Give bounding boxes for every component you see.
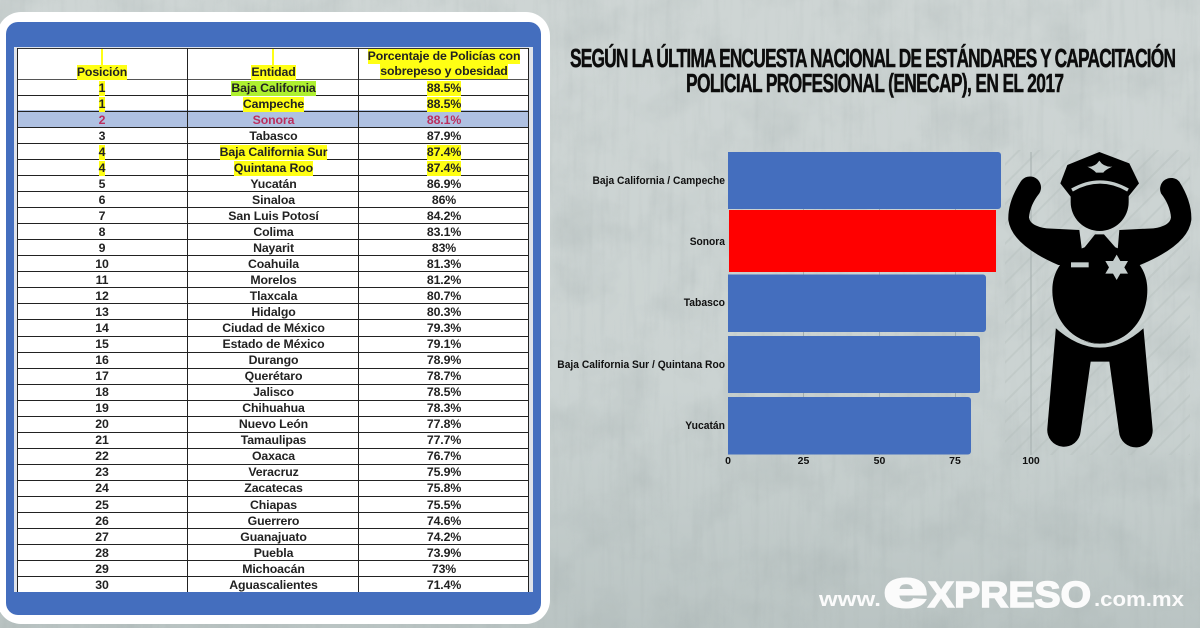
value axis labels: 50 <box>874 455 885 467</box>
highlighted row: Sonora <box>13 110 533 128</box>
table: ranking by state: Jalisco <box>253 385 294 399</box>
table: ranking by state: Ciudad de México <box>222 321 325 335</box>
table backing <box>14 47 532 592</box>
table: ranking by state <box>17 48 529 592</box>
table: ranking by state: 28 <box>95 546 109 560</box>
bar: Tabasco <box>728 274 986 332</box>
table: ranking by state: 12 <box>95 289 109 303</box>
table: ranking by state: Quintana Roo <box>234 161 313 175</box>
table: ranking by state: Zacatecas <box>244 481 303 495</box>
table: ranking by state: Sinaloa <box>252 193 295 207</box>
table: ranking by state: 83% <box>432 241 456 255</box>
table: ranking by state: Estado de México <box>223 337 324 351</box>
table: ranking by state: 81.3% <box>427 257 461 271</box>
table: ranking by state: Durango <box>249 353 298 367</box>
table: ranking by state: 3 <box>99 129 105 143</box>
table: ranking by state: Chiapas <box>250 498 297 512</box>
table: ranking by state: 24 <box>95 481 109 495</box>
table: ranking by state: Sonora <box>253 113 294 127</box>
table: ranking by state: Puebla <box>254 546 293 560</box>
panel: blue table frame <box>6 22 541 614</box>
category labels: Yucatán <box>685 420 725 432</box>
table header: sobrepeso y obesidad <box>380 64 508 78</box>
table: ranking by state: 74.6% <box>427 514 461 528</box>
value axis labels: 25 <box>798 455 809 467</box>
table header: Entidad <box>251 64 296 78</box>
table: ranking by state: 86.9% <box>427 177 461 191</box>
table: ranking by state: Coahuila <box>248 257 299 271</box>
table: ranking by state: 29 <box>95 562 109 576</box>
table: ranking by state: 9 <box>99 241 105 255</box>
table: ranking by state: 84.2% <box>427 209 461 223</box>
table: ranking by state: 77.7% <box>427 433 461 447</box>
category labels <box>557 175 726 432</box>
title: SEGÚN LA ÚLTIMA ENCUESTA NACIONAL DE ESTÁNDARES Y CAPACITACIÓN <box>570 43 1176 73</box>
table: ranking by state: 78.7% <box>427 369 461 383</box>
category labels: Baja California Sur / Quintana Roo <box>557 359 725 371</box>
table: ranking by state: 6 <box>99 193 105 207</box>
category labels: Baja California / Campeche <box>592 175 725 187</box>
table: ranking by state: 77.8% <box>427 417 461 431</box>
bar: Baja California Sur / Quintana Roo <box>728 336 980 393</box>
bar: Sonora <box>729 210 996 272</box>
legs <box>1047 327 1153 447</box>
table: ranking by state: 79.3% <box>427 321 461 335</box>
table: ranking by state: Hidalgo <box>251 305 296 319</box>
table: ranking by state: Guerrero <box>248 514 299 528</box>
table: ranking by state: 27 <box>95 530 109 544</box>
table: ranking by state: 7 <box>99 209 105 223</box>
table: ranking by state: Yucatán <box>250 177 297 191</box>
table: ranking by state: 73% <box>432 562 456 576</box>
head <box>1071 188 1129 231</box>
table: ranking by state: 8 <box>99 225 105 239</box>
table: ranking by state: 80.7% <box>427 289 461 303</box>
table: ranking by state: 76.7% <box>427 449 461 463</box>
category labels: Tabasco <box>684 297 725 309</box>
logo: expreso.com.mx: e <box>883 560 928 619</box>
table: ranking by state: 10 <box>95 257 109 271</box>
table: ranking by state: 5 <box>99 177 105 191</box>
title <box>570 43 1176 98</box>
table: ranking by state: 87.9% <box>427 129 461 143</box>
table: ranking by state: 75.8% <box>427 481 461 495</box>
value axis labels <box>725 455 1040 467</box>
table: ranking by state: Nayarit <box>253 241 294 255</box>
table: ranking by state: 86% <box>432 193 456 207</box>
table: ranking by state: 2 <box>99 113 105 127</box>
logo: expreso.com.mx <box>818 560 1184 619</box>
table: ranking by state: 22 <box>95 449 109 463</box>
value axis labels: 100 <box>1022 455 1040 467</box>
table: ranking by state: 88.5% <box>427 81 461 95</box>
name bar <box>1071 262 1089 267</box>
table: ranking by state: 83.1% <box>427 225 461 239</box>
table: ranking by state: Oaxaca <box>252 449 295 463</box>
table: ranking by state: Aguascalientes <box>229 578 318 592</box>
table: ranking by state: 11 <box>96 273 108 287</box>
table: ranking by state: 26 <box>95 514 109 528</box>
category labels: Sonora <box>690 236 726 248</box>
table: ranking by state: 75.5% <box>427 498 461 512</box>
table: ranking by state: 78.5% <box>427 385 461 399</box>
table: ranking by state: 87.4% <box>427 145 461 159</box>
table: ranking by state: Colima <box>253 225 294 239</box>
table: ranking by state: 81.2% <box>427 273 461 287</box>
table: ranking by state: Baja California Sur <box>220 145 327 159</box>
bar: Baja California / Campeche <box>728 152 1001 209</box>
arms and shoulders <box>1008 176 1191 265</box>
table: ranking by state: 23 <box>95 465 109 479</box>
table: ranking by state: Michoacán <box>242 562 305 576</box>
belly <box>1052 245 1147 343</box>
table: ranking by state: Morelos <box>250 273 297 287</box>
table: ranking by state: San Luis Potosí <box>228 209 319 223</box>
table: ranking by state: 18 <box>95 385 109 399</box>
star badge <box>1105 255 1128 280</box>
table: ranking by state: 1 <box>99 97 105 111</box>
table: ranking by state: 21 <box>95 433 109 447</box>
bar chart: top states <box>557 152 1040 467</box>
table header: Porcentaje de Policías con <box>368 49 520 63</box>
logo: expreso.com.mx: .com.mx <box>1094 589 1184 611</box>
table: ranking by state: Tabasco <box>249 129 298 143</box>
table: ranking by state: 30 <box>95 578 109 592</box>
table: ranking by state: 13 <box>95 305 109 319</box>
title: POLICIAL PROFESIONAL (ENECAP), EN EL 2017 <box>686 69 1064 98</box>
value axis labels: 0 <box>725 455 731 467</box>
table: ranking by state: Querétaro <box>245 369 302 383</box>
table: ranking by state: 4 <box>99 145 105 159</box>
table: ranking by state: Tamaulipas <box>241 433 306 447</box>
table: ranking by state: 87.4% <box>427 161 461 175</box>
table: ranking by state: 78.9% <box>427 353 461 367</box>
table: ranking by state: 20 <box>95 417 109 431</box>
table header: Posición <box>77 64 127 78</box>
table: ranking by state: 80.3% <box>427 305 461 319</box>
value axis labels: 75 <box>949 455 961 467</box>
table: ranking by state: 79.1% <box>427 337 461 351</box>
table header <box>17 48 529 80</box>
table: ranking by state: Guanajuato <box>240 530 307 544</box>
table: ranking by state: Nuevo León <box>239 417 308 431</box>
table: ranking by state: 1 <box>99 81 105 95</box>
table: ranking by state: Campeche <box>243 97 304 111</box>
table: ranking by state: Chihuahua <box>242 401 305 415</box>
panel: table card <box>0 12 550 624</box>
table: ranking by state: Baja California <box>231 81 316 95</box>
table: ranking by state: 75.9% <box>427 465 461 479</box>
table: ranking by state: 14 <box>95 321 109 335</box>
table: ranking by state: 88.1% <box>427 113 461 127</box>
logo: expreso.com.mx: XPRESO <box>928 574 1091 615</box>
table: ranking by state: 17 <box>95 369 109 383</box>
table: ranking by state: 78.3% <box>427 401 461 415</box>
hat <box>1060 152 1139 197</box>
table: ranking by state: 74.2% <box>427 530 461 544</box>
table: ranking by state: 88.5% <box>427 97 461 111</box>
table: ranking by state: 16 <box>95 353 109 367</box>
table: ranking by state: 19 <box>95 401 109 415</box>
bar: Yucatán <box>728 397 971 454</box>
table: ranking by state: 25 <box>95 498 109 512</box>
table: ranking by state: 71.4% <box>427 578 461 592</box>
table: ranking by state: 4 <box>99 161 105 175</box>
table: ranking by state: Veracruz <box>248 465 299 479</box>
table: ranking by state: Tlaxcala <box>250 289 297 303</box>
table: ranking by state: 15 <box>95 337 109 351</box>
table: ranking by state: 73.9% <box>427 546 461 560</box>
icon: police officer <box>1008 152 1192 448</box>
logo: expreso.com.mx: www. <box>818 589 881 611</box>
